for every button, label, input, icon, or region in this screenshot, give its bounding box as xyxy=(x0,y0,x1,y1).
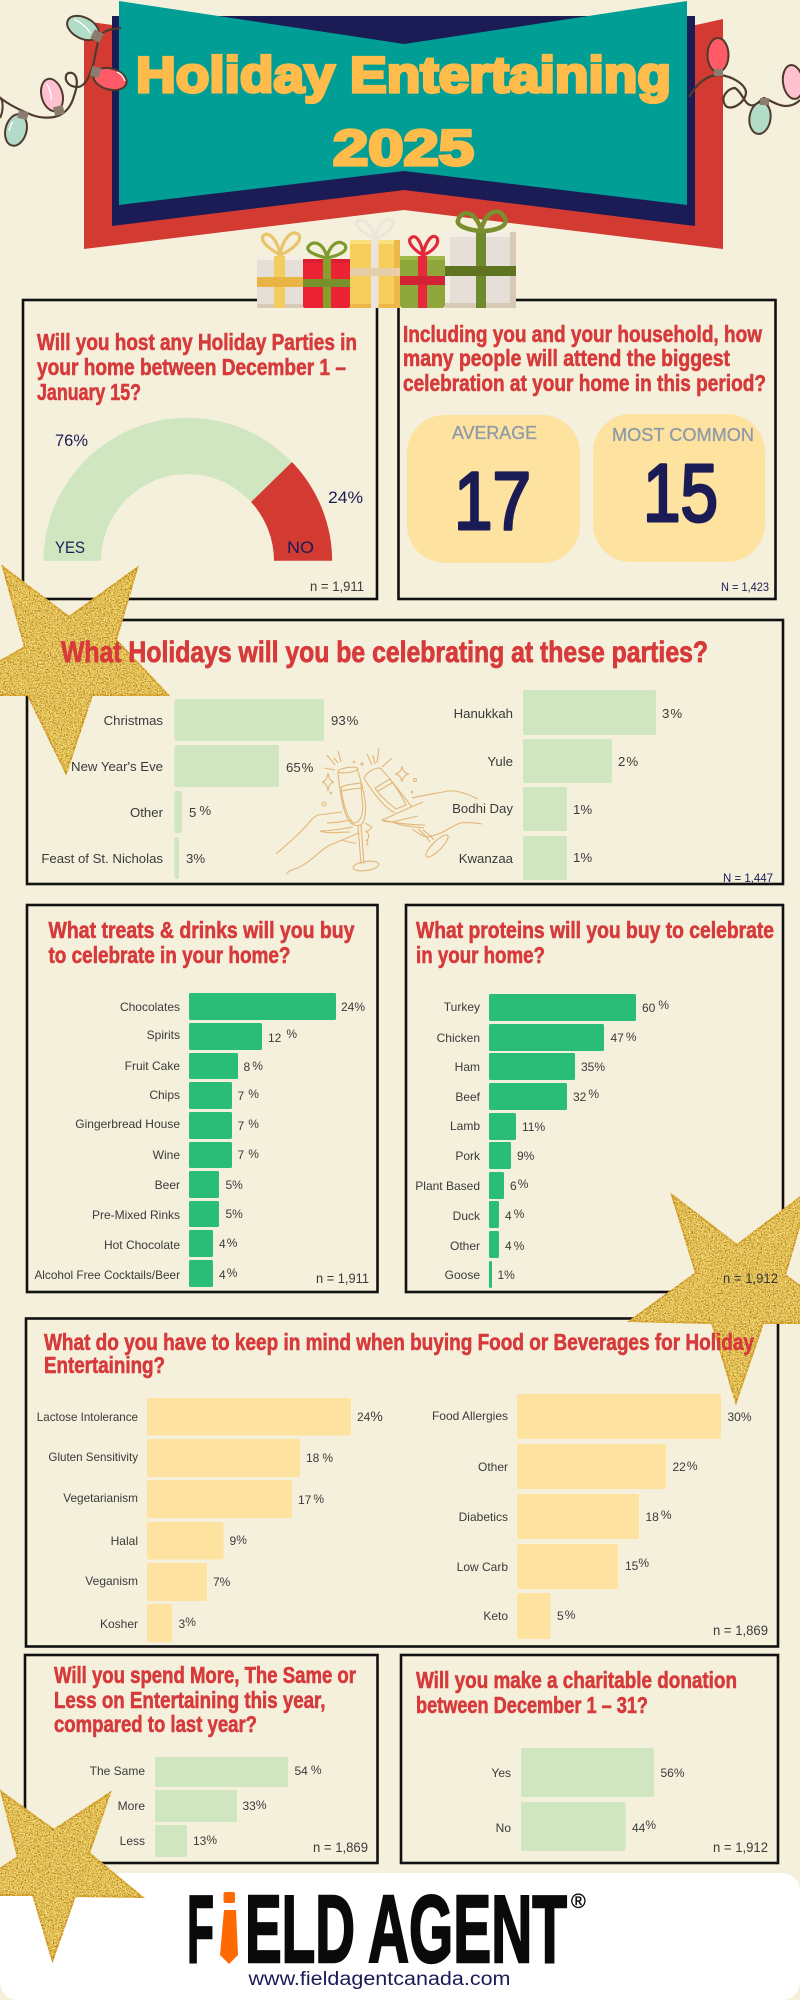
panel content: holidays xyxy=(41,636,773,885)
sample size: n = 1,912 xyxy=(723,1271,778,1286)
bar: Hanukkah: Hanukkah xyxy=(454,706,513,721)
bar: Bodhi Day: Bodhi Day xyxy=(452,801,513,816)
bar: Kosher: % xyxy=(185,1615,196,1629)
bar: Pork xyxy=(455,1142,535,1169)
bar: More: 33 xyxy=(242,1799,256,1813)
bar: Plant Based xyxy=(415,1172,529,1199)
bar: Christmas: 93% xyxy=(331,713,359,728)
bar: Lactose Intolerance xyxy=(37,1398,383,1436)
bar: Keto xyxy=(483,1593,576,1639)
bar: Low Carb: Low Carb xyxy=(457,1560,508,1574)
panel: charitable donation xyxy=(401,1655,778,1863)
bar: Wine: 7 xyxy=(238,1148,244,1162)
bar: Lactose Intolerance: Lactose Intolerance xyxy=(37,1411,138,1424)
chart: dietary right bars xyxy=(432,1394,752,1639)
bar: Hot Chocolate: % xyxy=(227,1236,238,1250)
bar: Fruit Cake xyxy=(125,1053,263,1079)
sample size: n = 1,869 xyxy=(713,1623,768,1638)
bar: Hanukkah xyxy=(454,690,682,735)
heading: spending: compared to last year? xyxy=(54,1711,257,1737)
bar: Christmas: Christmas xyxy=(104,713,163,728)
bar: Beer xyxy=(155,1171,243,1198)
bar: Less: % xyxy=(206,1833,217,1847)
chart: holidays left bars xyxy=(41,699,359,879)
chart: gauge yes no: NO xyxy=(287,538,314,557)
bar: Less: Less xyxy=(120,1834,145,1848)
bar: Wine xyxy=(153,1142,259,1168)
bar: Pre-Mixed Rinks: 5% xyxy=(226,1207,243,1221)
heading: spending: Will you spend More, The Same or xyxy=(54,1662,356,1688)
card: average xyxy=(407,415,580,563)
panel: will you host xyxy=(23,300,377,599)
heading: dietary: Entertaining? xyxy=(44,1352,165,1378)
bar: Duck xyxy=(453,1201,525,1228)
bar: Food Allergies: 30% xyxy=(728,1410,752,1424)
heading: host question: Will you host any Holiday Parties in xyxy=(37,329,357,355)
bar: Gluten Sensitivity xyxy=(48,1439,333,1477)
bar: Chips: 7 xyxy=(238,1089,244,1103)
panel frame: holidays xyxy=(27,620,783,884)
icon: champagne toast xyxy=(276,748,482,874)
bar: More: More xyxy=(118,1799,145,1813)
bar: Vegetarianism: Vegetarianism xyxy=(63,1491,138,1505)
bar: Duck: % xyxy=(514,1207,525,1221)
bar: Pre-Mixed Rinks: Pre-Mixed Rinks xyxy=(92,1208,180,1222)
bar: Other: Other xyxy=(450,1239,480,1253)
card: average: 17 xyxy=(454,456,531,547)
bar: Food Allergies xyxy=(432,1394,752,1439)
bar: Plant Based: Plant Based xyxy=(415,1179,480,1193)
bar: Yule xyxy=(487,739,638,783)
bar: Less xyxy=(120,1825,217,1857)
title: Holiday Entertaining xyxy=(136,47,671,103)
bar: Low Carb: % xyxy=(638,1556,649,1570)
icon: gift boxes xyxy=(257,212,516,308)
bar: Alcohol Free Cocktails/Beer: 4 xyxy=(219,1268,226,1282)
bar: Lamb: Lamb xyxy=(450,1119,480,1133)
heading: proteins xyxy=(416,917,774,968)
logo: Field Agent: ® xyxy=(571,1891,586,1913)
bar: Food Allergies: Food Allergies xyxy=(432,1409,508,1423)
bar: Duck: 4 xyxy=(505,1209,512,1223)
bar: Ham: Ham xyxy=(455,1060,480,1074)
panel: biggest celebration xyxy=(398,300,776,599)
bar: Bodhi Day: 1% xyxy=(573,802,592,817)
title banner xyxy=(84,1,723,249)
panel: spend more or less xyxy=(25,1655,378,1863)
sample size: n = 1,869 xyxy=(313,1840,368,1855)
bar: Pork: 9% xyxy=(517,1149,535,1163)
bar: Bodhi Day xyxy=(452,787,592,831)
bar: Chicken: % xyxy=(626,1030,637,1044)
bar: Diabetics: Diabetics xyxy=(459,1510,508,1524)
bar: Yule: Yule xyxy=(487,754,513,769)
bar: Other xyxy=(130,791,211,833)
bar: Other: % xyxy=(687,1459,698,1473)
bar: Yes xyxy=(491,1748,685,1797)
heading: treats: to celebrate in your home? xyxy=(48,942,290,968)
star: gold right xyxy=(630,1190,800,1402)
website url: www.fieldagentcanada.com xyxy=(247,1969,510,1990)
bar: Beer: Beer xyxy=(155,1178,180,1192)
bar: Halal xyxy=(111,1522,247,1560)
bar: Pre-Mixed Rinks xyxy=(92,1201,243,1227)
bar: Veganism xyxy=(85,1563,231,1601)
sample size: N = 1,447 xyxy=(723,871,773,885)
card: most common: 15 xyxy=(643,448,718,539)
bar: Turkey xyxy=(444,994,669,1021)
bar: Chips: % xyxy=(248,1087,259,1101)
bar: Spirits: Spirits xyxy=(147,1028,180,1042)
bar: Chips xyxy=(149,1082,259,1109)
bar: Goose xyxy=(445,1261,515,1288)
panel frame: proteins xyxy=(406,905,783,1292)
bar: Chocolates: 24% xyxy=(341,1000,365,1014)
bar: Vegetarianism: % xyxy=(313,1492,324,1506)
heading: donation: between December 1 – 31? xyxy=(416,1692,648,1718)
heading: proteins: in your home? xyxy=(416,942,545,968)
bar: Spirits: % xyxy=(286,1027,297,1041)
heading: attendance question: many people will attend the biggest xyxy=(403,345,730,371)
chart: gauge yes no: YES xyxy=(55,538,85,557)
bar: Keto: % xyxy=(565,1608,576,1622)
bar: Feast of St. Nicholas: 3% xyxy=(186,851,205,866)
bar: Turkey: Turkey xyxy=(444,1000,480,1014)
card: most common: MOST COMMON xyxy=(612,425,754,445)
bar: Wine: % xyxy=(248,1147,259,1161)
bar: No: % xyxy=(645,1818,656,1832)
bar: Fruit Cake: % xyxy=(252,1059,263,1073)
bar: Beef: 32 xyxy=(573,1090,586,1104)
bar: Hanukkah: 3% xyxy=(662,706,682,721)
panel frame: treats and drinks xyxy=(27,905,378,1292)
panel content: dietary needs xyxy=(37,1329,768,1642)
bar: Chocolates xyxy=(120,993,365,1020)
bar: Pork: Pork xyxy=(455,1149,481,1163)
bar: Keto: Keto xyxy=(483,1609,508,1623)
bar: Halal: Halal xyxy=(111,1534,138,1548)
bar: The Same xyxy=(90,1757,322,1787)
bar: Spirits xyxy=(147,1023,297,1050)
bar: Other: Other xyxy=(478,1460,508,1474)
bar: The Same: % xyxy=(311,1763,322,1777)
bar: More: % xyxy=(256,1798,267,1812)
bar: Beer: 5% xyxy=(226,1178,243,1192)
icon: string of lights left xyxy=(0,11,129,148)
sample size: n = 1,912 xyxy=(713,1840,768,1855)
bar: Plant Based: 6 xyxy=(510,1179,517,1193)
heading: host question: January 15? xyxy=(37,379,141,405)
bar: Chips: Chips xyxy=(149,1088,180,1102)
bar: Vegetarianism: 17 xyxy=(298,1493,311,1507)
chart: dietary left bars xyxy=(37,1398,383,1642)
heading: host question xyxy=(37,329,357,405)
bar: Yes: 56% xyxy=(660,1766,685,1780)
bar: Duck: Duck xyxy=(453,1209,481,1223)
bar: Diabetics: % xyxy=(661,1508,672,1522)
bar: Low Carb: 15 xyxy=(625,1559,638,1573)
sample size: n = 1,911 xyxy=(316,1271,369,1286)
bar: Kwanzaa xyxy=(459,836,592,880)
chart: gauge yes no: 76% xyxy=(55,431,88,450)
bar: Kwanzaa: Kwanzaa xyxy=(459,851,514,866)
bar: Beef: % xyxy=(588,1087,599,1101)
sample size: n = 1,911 xyxy=(310,579,364,594)
bar: Veganism: Veganism xyxy=(85,1574,138,1588)
logo: Field Agent: AGENT xyxy=(368,1876,567,1983)
bar: Diabetics xyxy=(459,1494,672,1539)
bar: Turkey: 60 xyxy=(642,1001,655,1015)
bar: Yes: Yes xyxy=(491,1766,511,1780)
bar: Hot Chocolate: Hot Chocolate xyxy=(104,1238,180,1252)
logo: Field Agent: ELD xyxy=(245,1876,355,1983)
bar: Alcohol Free Cocktails/Beer: Alcohol Free Cocktails/Beer xyxy=(34,1268,180,1282)
bar: Other: % xyxy=(199,803,211,818)
bar: More xyxy=(118,1790,267,1822)
bar: Alcohol Free Cocktails/Beer: % xyxy=(227,1266,238,1280)
bar: Gingerbread House: Gingerbread House xyxy=(75,1117,180,1131)
bar: Christmas xyxy=(104,699,359,741)
heading: attendance question xyxy=(403,321,766,396)
sample size: N = 1,423 xyxy=(721,580,769,594)
bar: Turkey: % xyxy=(658,998,669,1012)
bar: No: No xyxy=(496,1821,511,1835)
title: 2025 xyxy=(333,120,474,176)
bar: Ham: 35% xyxy=(581,1060,605,1074)
bar: Yule: 2% xyxy=(618,754,638,769)
bar: Kosher: 3 xyxy=(178,1617,185,1631)
bar: Chicken xyxy=(437,1024,637,1051)
bar: New Year's Eve: New Year's Eve xyxy=(71,759,163,774)
bar: New Year's Eve xyxy=(71,745,314,787)
bar: Veganism: 7% xyxy=(213,1575,231,1589)
bar: Spirits: 12 xyxy=(268,1031,281,1045)
icon: string of lights right xyxy=(689,38,800,135)
bar: Keto: 5 xyxy=(557,1609,564,1623)
heading: spending: Less on Entertaining this year, xyxy=(54,1687,326,1713)
card: average: AVERAGE xyxy=(452,423,537,443)
bar: Beef xyxy=(455,1083,599,1110)
bar: Gluten Sensitivity: 18% xyxy=(306,1451,333,1465)
bar: Lamb: 11% xyxy=(522,1120,545,1134)
bar: Diabetics: 18 xyxy=(646,1510,659,1524)
bar: Goose: 1% xyxy=(498,1268,515,1282)
bar: Chicken: Chicken xyxy=(437,1031,480,1045)
bar: Kwanzaa: 1% xyxy=(573,850,592,865)
heading: dietary xyxy=(44,1329,754,1378)
bar: Chocolates: Chocolates xyxy=(120,1000,180,1014)
heading: donation xyxy=(416,1667,737,1718)
heading: treats xyxy=(48,917,355,968)
bar: Kosher: Kosher xyxy=(100,1617,138,1631)
bar: Alcohol Free Cocktails/Beer xyxy=(34,1260,238,1287)
bar: Other xyxy=(478,1444,698,1489)
bar: No xyxy=(496,1802,656,1851)
logo: Field Agent xyxy=(187,1876,586,1983)
bar: Other: 22 xyxy=(672,1460,686,1474)
bar: Other: 5 xyxy=(189,805,196,820)
panel content: proteins xyxy=(415,917,778,1288)
bar: The Same: 54 xyxy=(294,1764,308,1778)
heading: spending xyxy=(54,1662,356,1737)
heading: treats: What treats & drinks will you buy xyxy=(48,917,355,943)
star: gold bottom left xyxy=(0,1792,142,1960)
bar: Wine: Wine xyxy=(153,1148,180,1162)
panel frame: dietary xyxy=(26,1318,778,1646)
bar: Lamb xyxy=(450,1113,545,1140)
bar: No: 44 xyxy=(632,1821,645,1835)
bar: Feast of St. Nicholas: Feast of St. Nicholas xyxy=(41,851,163,866)
bar: Vegetarianism xyxy=(63,1480,324,1518)
bar: Gingerbread House: 7 xyxy=(238,1119,244,1133)
panel content: treats and drinks xyxy=(34,917,369,1287)
bar: Other xyxy=(450,1231,525,1258)
bar: Fruit Cake: 8 xyxy=(244,1060,250,1074)
heading: host question: your home between December 1 – xyxy=(37,354,346,380)
title xyxy=(136,47,671,176)
chart: gauge yes no: 24% xyxy=(328,488,363,507)
bar: Chicken: 47 xyxy=(610,1031,624,1045)
bar: The Same: The Same xyxy=(90,1764,145,1778)
card: most common xyxy=(593,414,765,562)
bar: New Year's Eve: 65% xyxy=(286,760,314,775)
bar: Gingerbread House: % xyxy=(248,1117,259,1131)
bar: Halal: 9 xyxy=(230,1534,236,1548)
bar: Other: Other xyxy=(130,805,164,820)
bar: Less: 13 xyxy=(193,1834,206,1848)
star: gold top left xyxy=(0,567,168,773)
bar: Gluten Sensitivity: Gluten Sensitivity xyxy=(48,1451,138,1464)
bar: Lactose Intolerance: 24% xyxy=(357,1408,383,1424)
bar: Feast of St. Nicholas xyxy=(41,837,205,879)
bar: Hot Chocolate xyxy=(104,1230,238,1257)
bar: Fruit Cake: Fruit Cake xyxy=(125,1059,180,1073)
bar: Ham xyxy=(455,1053,605,1080)
chart: gauge yes no xyxy=(43,418,363,561)
bar: Gingerbread House xyxy=(75,1112,259,1139)
bar: Hot Chocolate: 4 xyxy=(219,1237,226,1251)
logo: Field Agent: F xyxy=(187,1876,214,1983)
bar: Plant Based: % xyxy=(518,1177,529,1191)
bar: Halal: % xyxy=(236,1533,247,1547)
bar: Beef: Beef xyxy=(455,1090,481,1104)
bar: Goose: Goose xyxy=(445,1268,480,1282)
heading: donation: Will you make a charitable donation xyxy=(416,1667,737,1693)
chart: holidays right bars xyxy=(452,690,682,880)
bar: Other: 4% xyxy=(505,1239,525,1253)
footer: white band xyxy=(0,1873,800,2000)
bar: Kosher xyxy=(100,1604,196,1642)
bar: Low Carb xyxy=(457,1544,649,1589)
